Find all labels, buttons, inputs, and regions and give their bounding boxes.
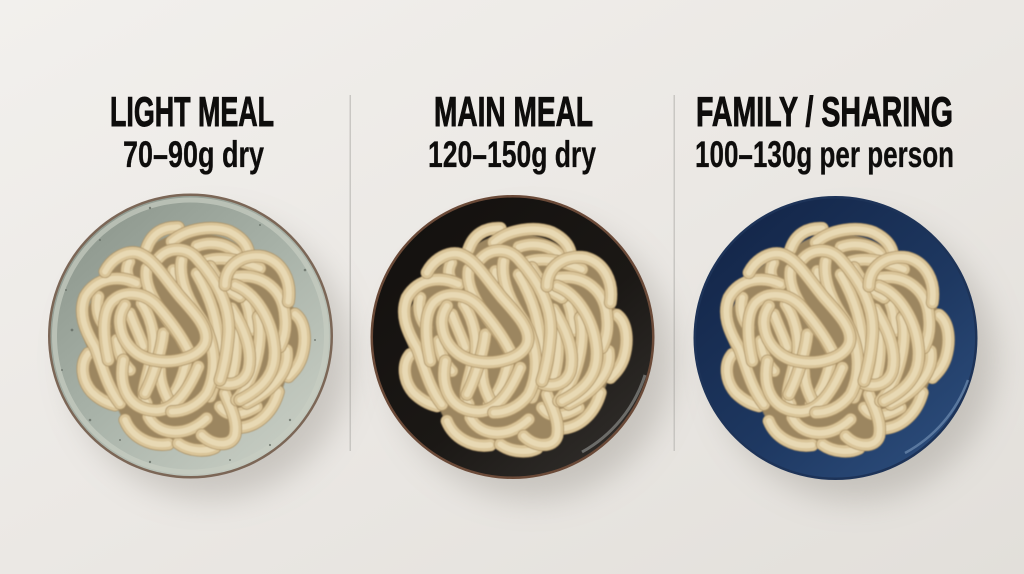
panel: main meal heading: MAIN MEAL: [434, 88, 593, 135]
bowl: light meal celadon bowl with noodles: [48, 194, 350, 498]
bowl: main meal dark bowl with noodles: [370, 195, 672, 499]
noodles: family sharing: [726, 228, 948, 451]
divider: left: [350, 95, 351, 451]
panel: light meal heading: 70–90g dry: [123, 134, 264, 175]
noodles: main meal: [404, 228, 626, 451]
divider: right: [674, 95, 675, 451]
noodles: light meal: [82, 227, 304, 450]
bowl: family sharing blue bowl with noodles: [694, 196, 995, 500]
panel: family sharing heading: [695, 88, 954, 175]
panel: main meal heading: [428, 88, 596, 175]
panel: light meal heading: [110, 88, 274, 175]
panel: main meal heading: 120–150g dry: [428, 134, 596, 175]
panel: light meal heading: LIGHT MEAL: [110, 88, 274, 135]
